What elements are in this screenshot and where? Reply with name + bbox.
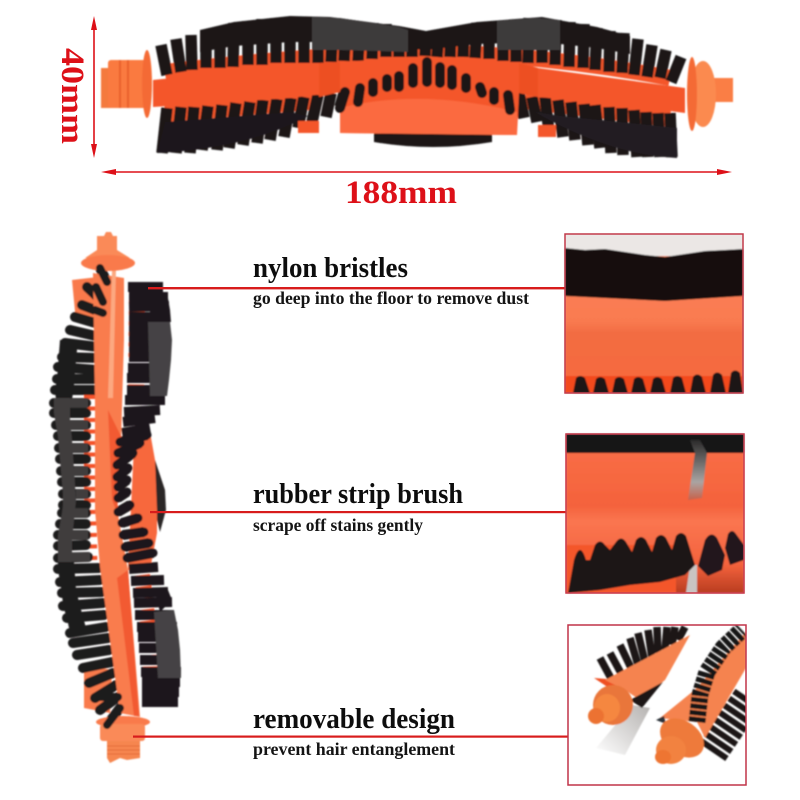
left hub [101,68,111,108]
leader line [150,511,566,513]
dimension: 40mm label: 40mm [54,48,90,144]
description: prevent hair entanglement [253,739,455,759]
bottom hub [96,716,150,728]
right stub rows over shaft [117,435,153,558]
vertical brush photo [54,232,181,763]
photo: removable brushes [568,625,750,785]
shaft [93,273,140,717]
roller body [153,57,685,135]
back plates [72,277,98,322]
right hub [712,78,733,102]
photo: rubber strip close-up [566,434,744,593]
left gray fringe [54,398,76,562]
orange stubs [90,395,102,650]
top hub [85,232,130,258]
lower support plates [298,121,556,137]
left tufts over shaft [95,268,120,725]
heading: nylon bristles [253,253,408,284]
leader line [148,287,565,289]
photo: nylon bristles close-up [565,234,743,393]
left bristles [54,268,120,725]
callout: removable design [133,704,568,759]
horizontal brush photo [101,16,733,158]
heading: rubber strip brush [253,479,463,510]
callout: rubber strip brush [150,479,566,535]
callout: nylon bristles [148,253,565,308]
description: go deep into the floor to remove dust [253,288,529,308]
heading: removable design [253,704,455,735]
leader line [133,736,568,738]
dimension: 188mm label: 188mm [345,175,457,211]
right bristles [117,287,181,702]
description: scrape off stains gently [253,515,423,535]
right gray fringe [148,322,181,678]
center tufts [340,62,510,110]
dimension: width arrow [101,169,732,175]
dimension: height arrow [91,16,97,158]
